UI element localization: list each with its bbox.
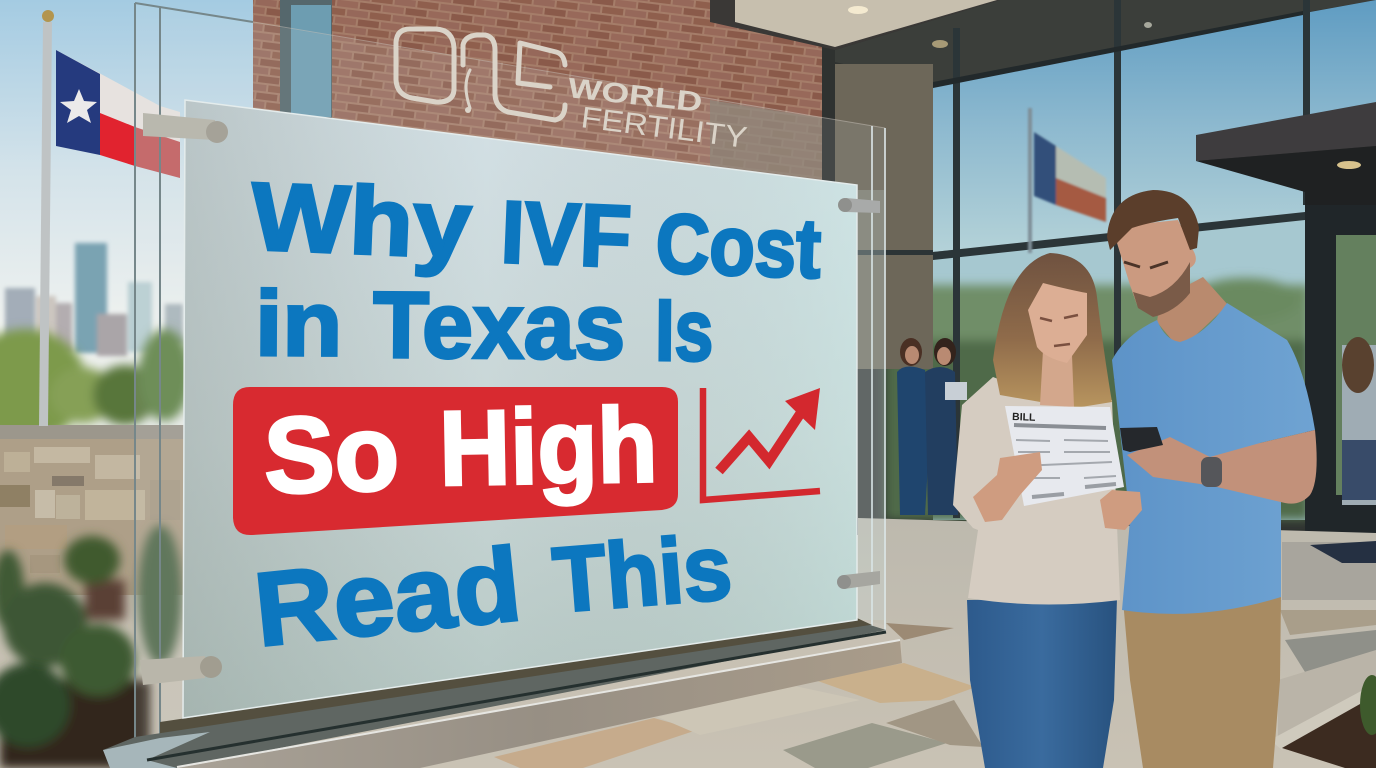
logo: One World Fertility: FERTILITY: [579, 101, 749, 155]
headline line 3: This: [550, 516, 735, 632]
glass facade: [822, 0, 1376, 535]
gap and base under the sign: [103, 618, 902, 768]
eyes and mouth: [1040, 315, 1078, 346]
face: [1117, 220, 1196, 317]
shrubs: [0, 525, 182, 768]
red highlight box: [233, 387, 678, 535]
headline line 2: in: [255, 273, 342, 375]
phone: [1120, 427, 1163, 452]
canopy: [1196, 102, 1376, 161]
door: [1305, 205, 1376, 533]
bill: BILL: [1012, 411, 1036, 424]
sweater: [953, 377, 1120, 605]
brick building: [253, 0, 823, 190]
beard: [1133, 262, 1190, 317]
hair: [993, 253, 1112, 408]
forearm and hand: [1127, 430, 1317, 504]
highlight text: High: [438, 386, 658, 508]
hair: [1107, 190, 1199, 250]
eyes: [1124, 262, 1168, 268]
headline line 1: Cost: [654, 196, 823, 296]
logo: One World Fertility: WORLD: [566, 72, 704, 118]
headline line 2: Texas: [373, 272, 626, 379]
blue t-shirt: [1112, 303, 1315, 614]
entry mat: [1310, 541, 1376, 563]
brown pillar: [835, 64, 933, 369]
staff in background: [897, 338, 967, 515]
trees: [0, 329, 191, 441]
city skyline: [5, 243, 183, 356]
flag pole: [39, 22, 52, 426]
sign: outer glass panel: [135, 3, 885, 745]
overhang: [710, 0, 1000, 50]
dark upper glazing: [835, 0, 1376, 87]
stone wall: [0, 425, 185, 595]
woman: [953, 253, 1120, 768]
highlight text: [262, 386, 658, 516]
khaki trousers: [1123, 595, 1281, 768]
curb and mulch: [1270, 686, 1376, 750]
wrist watch: [1201, 457, 1222, 487]
icon: Texas flag: [56, 50, 180, 178]
headline line 1: [249, 163, 823, 296]
headline line 1: Why: [249, 163, 473, 279]
icon: rising chart arrow: [703, 388, 820, 500]
pavement: [420, 518, 1376, 768]
logo: One World Fertility: [396, 29, 749, 155]
highlight text: So: [262, 391, 401, 516]
sky: [0, 0, 260, 430]
sign: front panel: [183, 100, 857, 718]
reflected flag: [1028, 108, 1106, 253]
bill: [1005, 406, 1124, 506]
people: couple: [953, 190, 1317, 768]
neck: [1040, 350, 1074, 407]
headline line 2: Is: [655, 282, 714, 379]
jeans: [967, 598, 1117, 768]
neck: [1157, 277, 1228, 350]
standoff brackets: [140, 113, 880, 685]
man: [1107, 190, 1317, 768]
headline line 2: [255, 272, 714, 379]
face: [1028, 283, 1087, 363]
headline line 1: IVF: [499, 182, 633, 286]
mullions: [953, 28, 960, 518]
sky reflection panes: [933, 0, 1376, 252]
headline line 3: Read: [250, 527, 526, 669]
hands: [973, 452, 1142, 530]
headline line 3: [250, 516, 735, 669]
headline: [233, 163, 823, 669]
